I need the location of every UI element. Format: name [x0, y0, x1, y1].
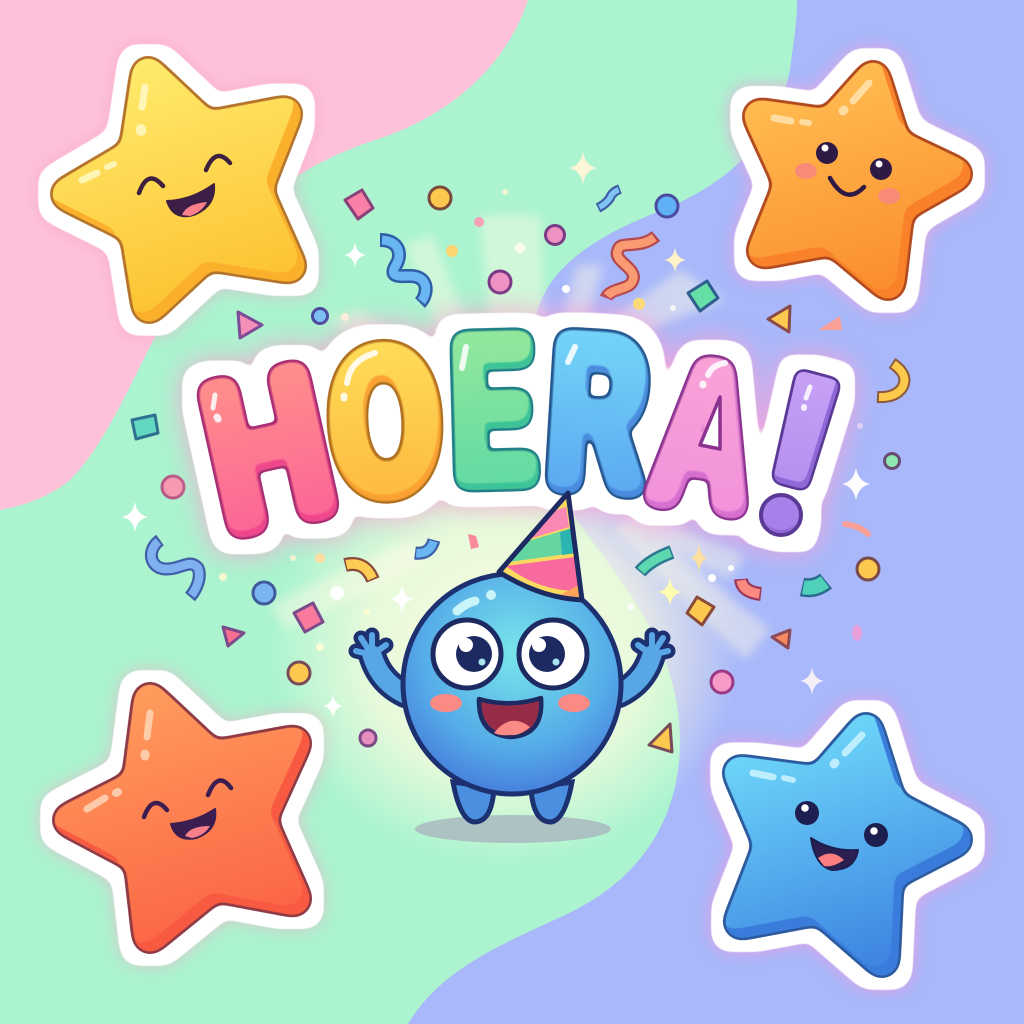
face: yellow star	[139, 156, 230, 216]
body highlight	[457, 601, 475, 611]
confetti: squares	[132, 190, 718, 632]
confetti and sparkles	[122, 151, 904, 752]
face: orange star	[795, 142, 900, 204]
letter exclamation mark: !	[719, 317, 877, 590]
highlights: orange star	[774, 83, 869, 123]
title: round dot of exclamation mark	[754, 488, 808, 542]
background: pink wave	[0, 0, 528, 510]
letter A: A	[641, 315, 768, 555]
letter O: O	[326, 305, 444, 537]
sparkles	[122, 151, 870, 718]
background: periwinkle wave	[408, 0, 1024, 1024]
star: red, bottom left	[70, 700, 294, 936]
ground shadow	[415, 815, 611, 843]
party hat	[499, 493, 582, 600]
body	[403, 574, 621, 794]
letter E: E	[450, 293, 537, 528]
light rays	[270, 215, 770, 660]
face: blue star	[795, 801, 888, 870]
title highlights	[213, 347, 810, 419]
confetti: ribbons	[151, 189, 904, 597]
highlights: yellow star	[82, 87, 145, 180]
right arm and hand	[619, 635, 668, 694]
central glow behind character	[270, 435, 740, 865]
feet	[453, 782, 572, 822]
confetti: triangles	[223, 306, 842, 752]
star: yellow, top left	[68, 74, 289, 306]
confetti: dots	[162, 187, 900, 746]
left arm and hand	[356, 635, 405, 694]
cheeks	[430, 694, 462, 712]
letter R: R	[544, 290, 652, 536]
mouth	[479, 698, 541, 737]
face: red star	[144, 780, 231, 839]
letter H: H	[185, 322, 350, 577]
title: HOERA!	[185, 290, 877, 590]
star: orange, top right	[760, 78, 955, 283]
character: blue mascot with party hat	[356, 493, 668, 843]
eyes	[433, 620, 587, 688]
highlights: blue star	[753, 735, 862, 780]
highlights: red star	[87, 713, 150, 809]
title: counter of letter A	[700, 397, 720, 449]
confetti: soft glitter dots	[219, 189, 863, 651]
star: blue, bottom right	[740, 730, 955, 960]
